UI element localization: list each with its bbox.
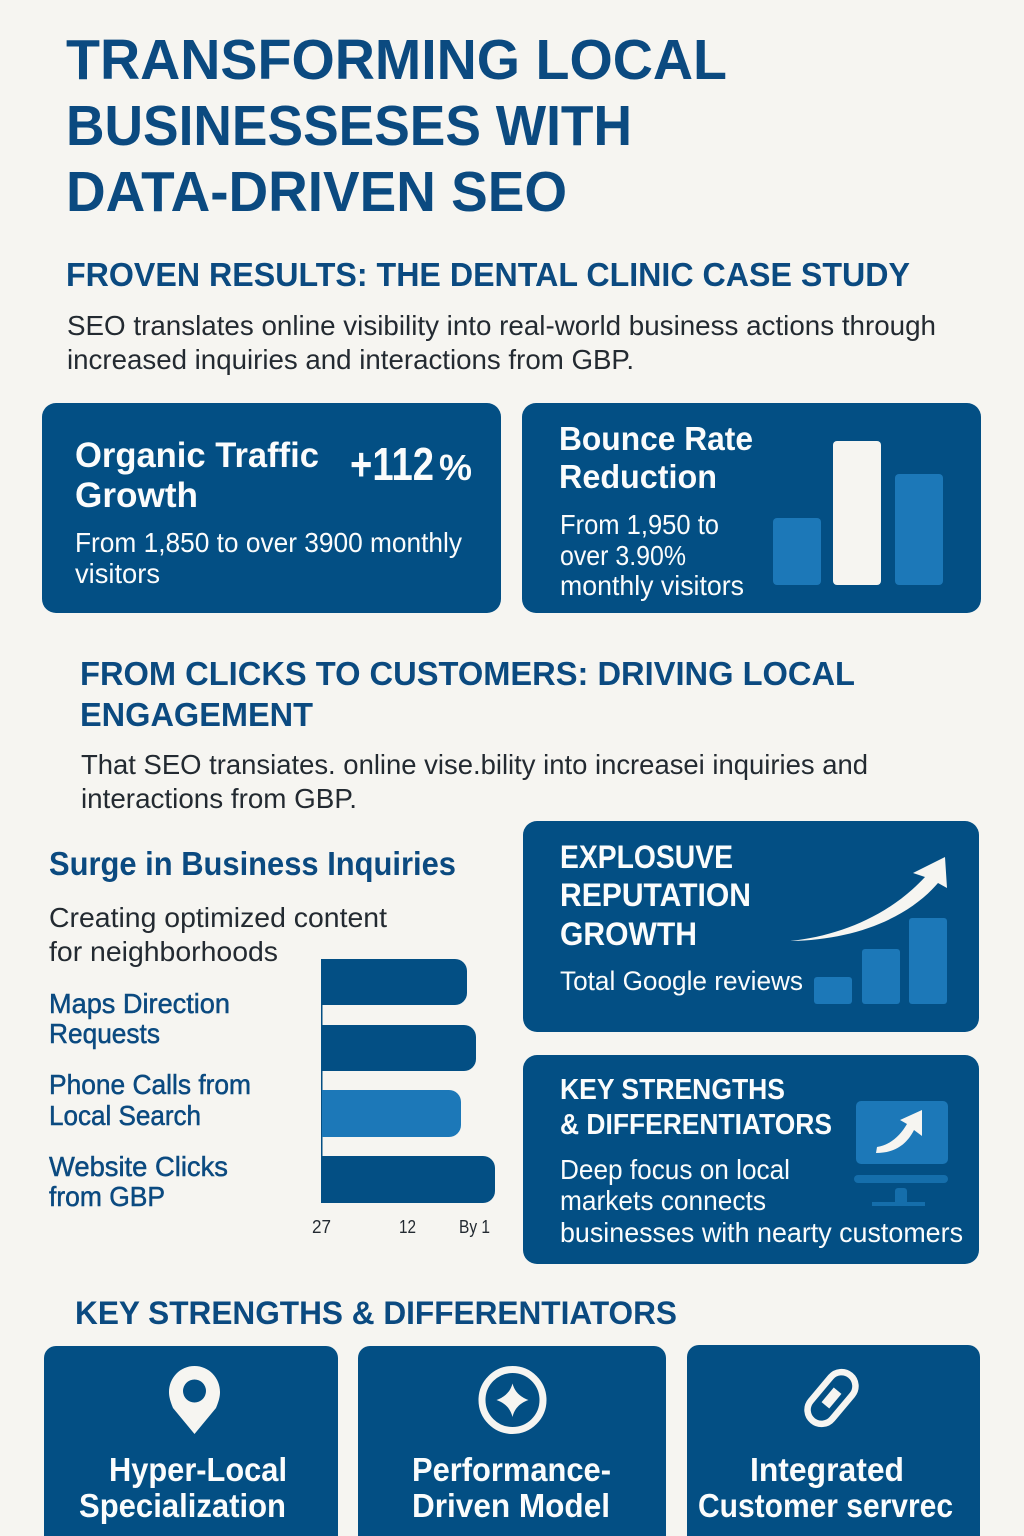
heading: key strengths and differentiators: KEY STRENGTHS & DIFFERENTIATORS (75, 1295, 677, 1331)
card label: Hyper-Local (109, 1451, 287, 1488)
card heading (75, 436, 319, 515)
card heading: Growth (75, 476, 198, 515)
panel: performance-driven model (358, 1346, 666, 1536)
card label: Customer servrec (698, 1487, 953, 1524)
chart labels: Phone Calls from (49, 1069, 251, 1100)
panel: key strengths card (523, 1055, 979, 1264)
card heading: KEY STRENGTHS (560, 1074, 785, 1106)
chart labels (49, 988, 251, 1212)
card description: Deep focus on local (560, 1154, 790, 1185)
surge description: Creating optimized content (49, 902, 387, 933)
heading: surge in business inquiries: Surge in Business Inquiries (49, 845, 456, 882)
axis labels: 27 (312, 1217, 331, 1237)
stat: +112%: % (439, 447, 472, 488)
axis labels: 12 (399, 1217, 416, 1237)
card heading: Organic Traffic (75, 436, 319, 475)
card description: visitors (75, 558, 160, 589)
card label (698, 1451, 953, 1524)
surge description: for neighborhoods (49, 936, 278, 967)
card label (412, 1451, 611, 1524)
chart labels: Local Search (49, 1100, 201, 1131)
card description (560, 509, 744, 601)
chart labels: Website Clicks (49, 1151, 228, 1182)
axis labels: By 1 (459, 1217, 490, 1237)
icon: bar chart (773, 441, 943, 585)
heading: from clicks to customers: FROM CLICKS TO CUSTOMERS: DRIVING LOCAL (80, 655, 855, 692)
card heading: REPUTATION (560, 877, 751, 913)
title (66, 28, 727, 224)
panel: organic traffic growth (42, 403, 501, 613)
card label: Driven Model (412, 1487, 610, 1524)
card description: markets connects (560, 1185, 766, 1216)
card label (79, 1451, 287, 1524)
section text block (81, 749, 868, 814)
icon: link (802, 1366, 861, 1430)
card heading (560, 1074, 832, 1141)
card label: Specialization (79, 1487, 286, 1524)
icon: compass star (482, 1370, 543, 1430)
panel: hyper-local specialization (44, 1346, 338, 1536)
title: DATA-DRIVEN SEO (66, 160, 567, 224)
card description: Total Google reviews (560, 966, 803, 996)
card description: over 3.90% (560, 540, 686, 571)
card description (560, 1154, 963, 1248)
heading: from clicks to customers: ENGAGEMENT (80, 696, 313, 733)
card description: businesses with nearty customers (560, 1217, 963, 1248)
panel: explosive reputation growth (523, 821, 979, 1032)
bar chart (312, 959, 495, 1237)
section text block: That SEO transiates. online vise.bility into increasei inquiries and (81, 749, 868, 780)
heading: proven results: FROVEN RESULTS: THE DENTAL CLINIC CASE STUDY (66, 256, 910, 293)
title: TRANSFORMING LOCAL (66, 28, 727, 92)
card description: monthly visitors (560, 570, 744, 601)
section text block: interactions from GBP. (81, 783, 357, 814)
intro text block: SEO translates online visibility into real-world business actions through (67, 310, 936, 341)
card heading (560, 839, 751, 952)
card heading (559, 420, 753, 495)
intro text block: increased inquiries and interactions from GBP. (67, 344, 634, 375)
card label: Integrated (750, 1451, 904, 1488)
panel: bounce rate reduction (522, 403, 981, 613)
title: BUSINESSESES WITH (66, 94, 632, 158)
card heading: & DIFFERENTIATORS (560, 1109, 832, 1141)
card heading: GROWTH (560, 916, 697, 952)
intro text block (67, 310, 936, 375)
chart labels: Requests (49, 1018, 160, 1049)
surge description (49, 902, 387, 967)
icon: map pin (169, 1366, 220, 1434)
card description: From 1,950 to (560, 509, 719, 540)
arrow: growth (790, 857, 947, 941)
card description (75, 527, 462, 589)
stat: +112%: +112 (350, 438, 434, 490)
icon: monitor with arrow (854, 1101, 948, 1206)
chart labels: from GBP (49, 1181, 165, 1212)
card description: From 1,850 to over 3900 monthly (75, 527, 462, 558)
card label: Performance- (412, 1451, 611, 1488)
axis labels (312, 1217, 490, 1237)
icon: growth bars (814, 918, 947, 1004)
heading: from clicks to customers (80, 655, 855, 733)
chart labels: Maps Direction (49, 988, 230, 1019)
card heading: EXPLOSUVE (560, 839, 733, 875)
card heading: Reduction (559, 458, 717, 495)
card heading: Bounce Rate (559, 420, 753, 457)
panel: integrated customer service (687, 1345, 980, 1536)
